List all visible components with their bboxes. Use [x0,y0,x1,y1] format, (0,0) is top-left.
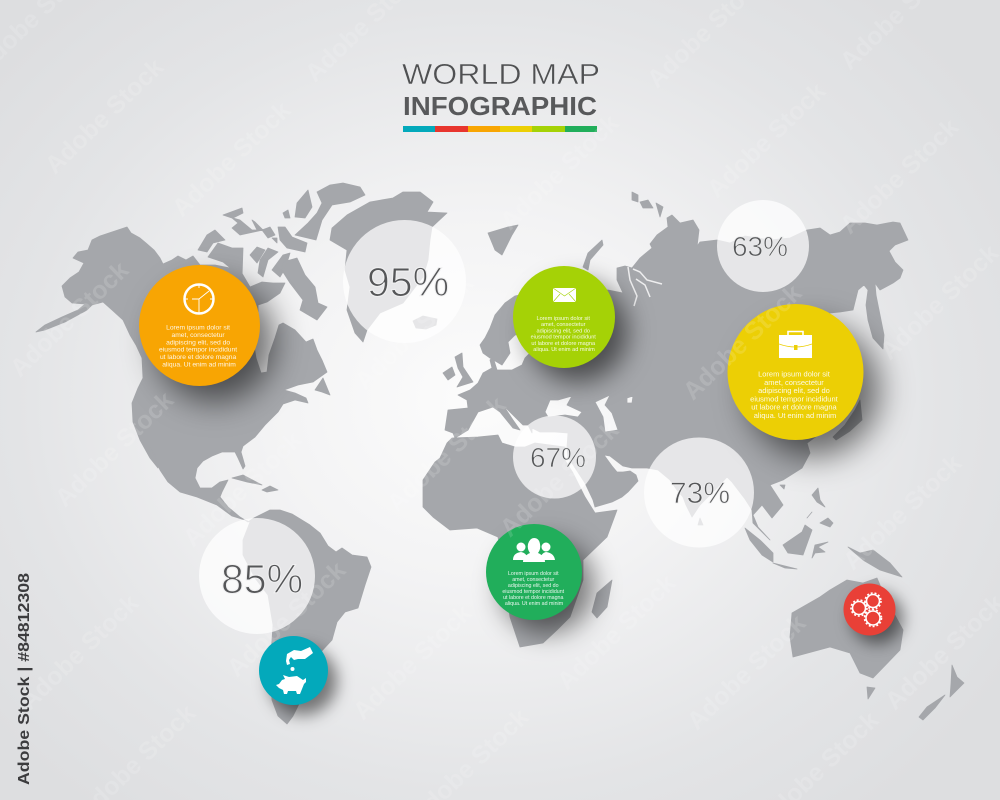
lime circle panel [513,266,628,382]
percent circle 85 [199,518,315,634]
caribbean islands [232,475,278,492]
percent circle 67 [513,416,596,498]
stock watermarks: Adobe Stock [495,416,624,542]
british isles [443,353,473,387]
iceland [413,316,437,329]
green text: Lorem ipsum dolor sit [508,571,559,577]
icon: briefcase [779,332,812,358]
green text: amet, consectetur [512,577,555,583]
arctic islands [198,183,365,395]
green text: eiusmod tempor incididunt [502,589,565,595]
green text: adipiscing elit, sed do [508,583,559,589]
yellow text: adipiscing elit, sed do [758,386,830,395]
americas [36,227,371,724]
stock watermarks: Adobe Stock [702,77,831,203]
stock watermarks: Adobe Stock [838,449,967,575]
tasmania [867,687,875,699]
percent circle 73 [644,438,754,548]
icon: hand and coin over piggy bank [276,647,313,694]
lime text: eiusmod tempor incididunt [531,335,596,341]
stock watermarks: Adobe Stock [15,589,144,715]
title: world map: WORLD MAP [402,59,600,91]
orange circle panel [139,265,275,402]
yellow text: aliqua. Ut enim ad minim [754,411,836,420]
green text: ut labore et dolore magna [503,595,563,601]
percent circle 95 [343,220,466,343]
orange text: ut labore et dolore magna [160,354,236,361]
yellow circle panel [728,304,880,457]
stock watermarks: Adobe Stock [495,109,624,235]
yellow text: amet, consectetur [764,378,824,387]
percent circle 73: 73% [670,477,730,510]
red circle panel [844,584,903,644]
world map [36,183,964,724]
title block [402,59,600,132]
stock watermarks: Adobe Stock [178,426,307,552]
japan [833,400,862,440]
title: infographic: INFOGRAPHIC [403,91,597,121]
orange text: aliqua. Ut enim ad minim [162,362,236,368]
africa [423,435,617,647]
south-east asia islands [698,485,833,569]
madagascar [592,580,612,618]
icon: gears [851,593,882,626]
stock watermarks: Adobe Stock [40,53,169,179]
colour bar [403,126,597,132]
orange text: amet, consectetur [171,332,225,339]
lime text: aliqua. Ut enim ad minim [533,347,595,353]
orange text: eiusmod tempor incididunt [159,347,237,354]
orange text: adipiscing elit, sed do [166,339,230,346]
svalbard and arctic russia islands [488,192,663,270]
scandinavia [480,290,545,365]
greenland [330,192,447,342]
stock watermarks: Adobe Stock [348,599,477,725]
new guinea [848,547,902,577]
percent circle 85: 85% [221,556,303,602]
percent circle 67: 67% [530,442,586,473]
stock watermarks: Adobe Stock [5,256,134,382]
stock watermarks: Adobe Stock [835,113,964,239]
green text: aliqua. Ut enim ad minim [505,601,564,607]
percent circle 95: 95% [367,259,449,305]
lime text: adipiscing elit, sed do [536,328,590,334]
stock watermarks: Adobe Stock [678,279,807,405]
stock watermarks: Adobe Stock [50,386,179,512]
orange text: Lorem ipsum dolor sit [166,324,230,332]
lime text: amet, consectetur [541,322,586,328]
icon: people [513,538,555,562]
yellow text: Lorem ipsum dolor sit [758,370,831,378]
percent circle 63 [717,200,809,292]
green circle panel [486,524,594,633]
vertical stock id: Adobe Stock | #84812308 [16,573,33,785]
new zealand [919,665,964,720]
stock watermarks: Adobe Stock [382,391,511,517]
lime text: ut labore et dolore magna [531,341,596,347]
yellow text: eiusmod tempor incididunt [750,394,839,403]
stock watermarks: Adobe Stock [350,269,479,395]
percent circle 63: 63% [732,231,788,262]
lime text: Lorem ipsum dolor sit [536,316,590,322]
stock watermarks: Adobe Stock [167,96,296,222]
stock watermarks: Adobe Stock [222,556,351,682]
australia [790,578,903,678]
icon: envelope [553,288,576,302]
eurasia [445,215,908,540]
icon: clock [184,284,214,314]
stock watermarks: Adobe Stock [682,609,811,735]
teal circle panel [259,636,337,715]
stock watermarks: Adobe Stock [552,569,681,695]
yellow text: ut labore et dolore magna [751,403,838,412]
